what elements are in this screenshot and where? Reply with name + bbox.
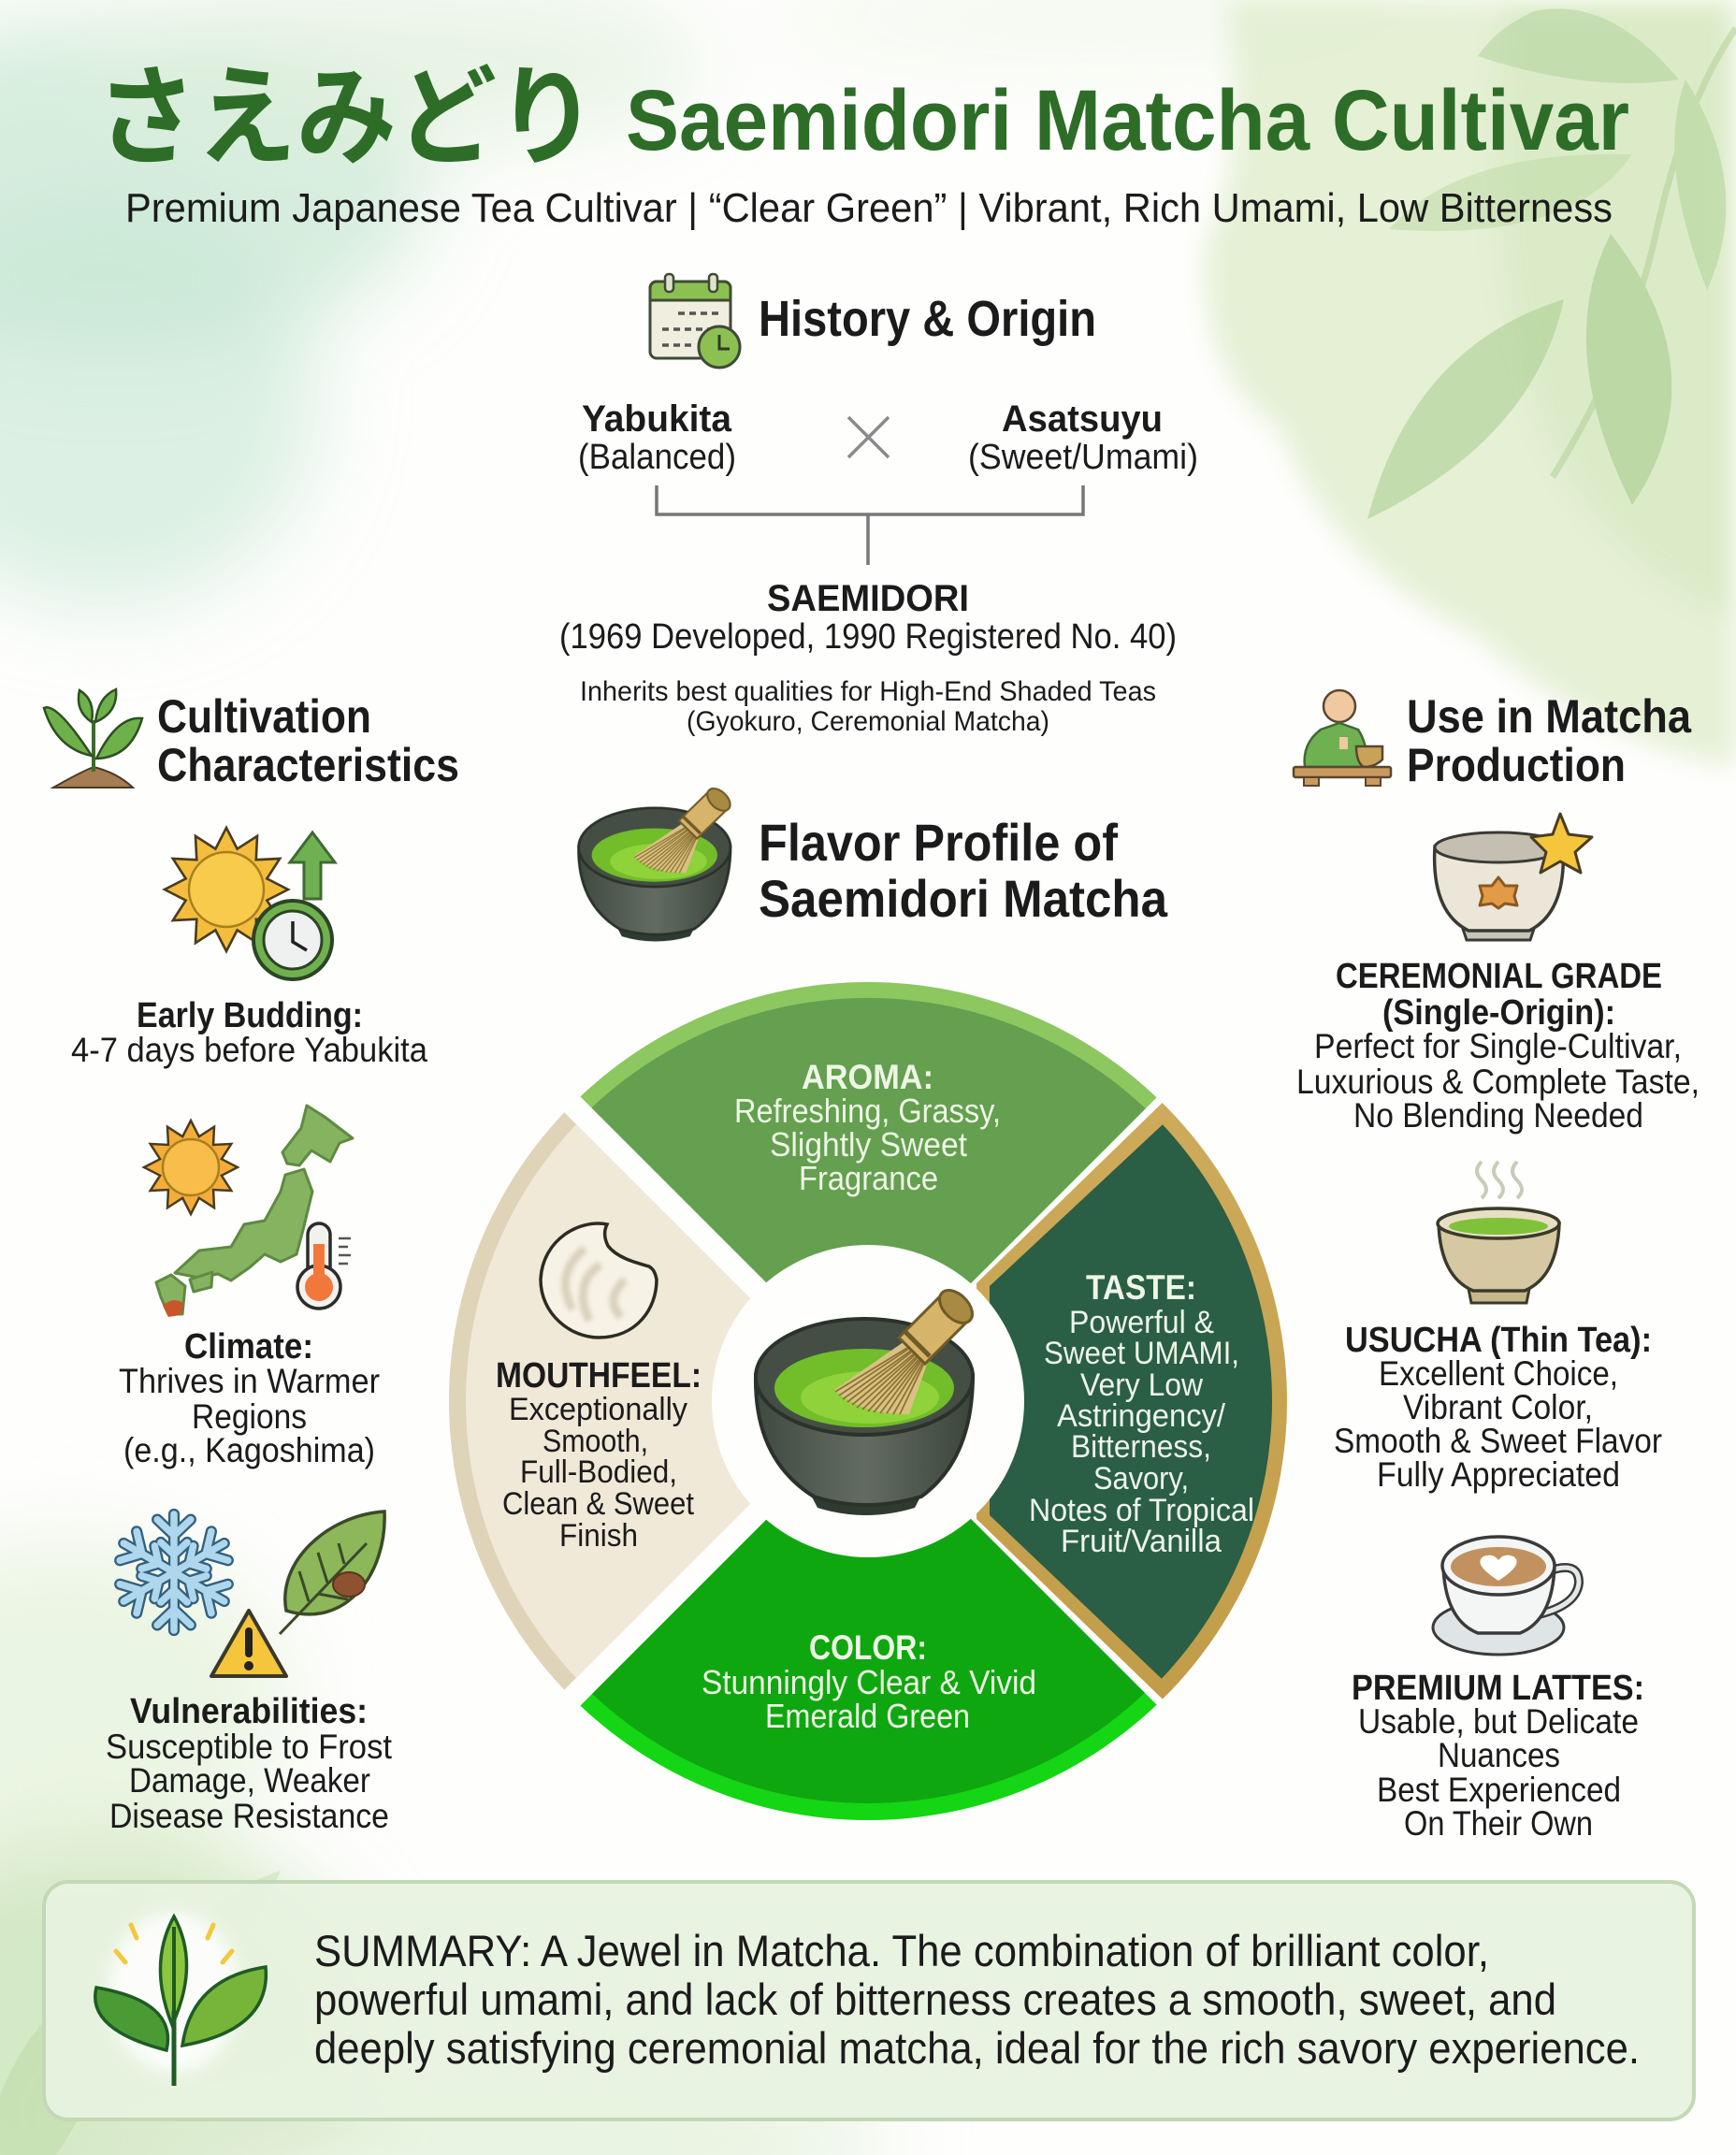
text: early budding <box>71 996 427 1069</box>
segment: aroma: AROMA: <box>802 1058 933 1096</box>
icon: small matcha bowl <box>579 785 734 942</box>
text: ceremonial grade: (Single-Origin): <box>1382 993 1615 1033</box>
segment: aroma <box>580 982 1156 1283</box>
summary text: powerful umami, and lack of bitterness creates a smooth, sweet, and <box>314 1974 1556 2024</box>
segment: mouthfeel <box>449 1113 750 1689</box>
heading: history and origin: History & Origin <box>759 291 1096 347</box>
segment: taste: Bitterness, <box>1071 1429 1211 1465</box>
icon: frost, diseased leaf and warning <box>115 1511 384 1676</box>
chart: flavor wheel <box>449 982 1287 1820</box>
icon: latte cup on saucer <box>1433 1537 1579 1655</box>
saemidori origin text <box>559 578 1177 737</box>
text: early budding: 4-7 days before Yabukita <box>71 1031 427 1069</box>
segment: mouthfeel: Full-Bodied, <box>520 1454 677 1490</box>
text: premium lattes: Best Experienced <box>1377 1771 1621 1809</box>
text: vulnerabilities: Susceptible to Frost <box>106 1728 393 1766</box>
icon: sun and japan map with thermometer <box>144 1106 353 1317</box>
cross symbol <box>848 417 889 457</box>
segment: taste: Fruit/Vanilla <box>1061 1524 1222 1559</box>
text: premium lattes <box>1352 1669 1644 1843</box>
text: usucha: Fully Appreciated <box>1377 1455 1620 1494</box>
icon: glowing tea sprout <box>95 1913 266 2086</box>
segment: taste: Notes of Tropical <box>1029 1493 1254 1528</box>
icon: calendar with clock <box>650 274 740 368</box>
text: premium lattes: Nuances <box>1438 1736 1560 1774</box>
saemidori origin text: Inherits best qualities for High-End Shaded Teas <box>580 676 1156 707</box>
heading: flavor profile with bowl icon <box>579 785 1168 942</box>
parent cultivar: Yabukita <box>578 398 736 477</box>
saemidori origin text: (1969 Developed, 1990 Registered No. 40) <box>559 617 1177 657</box>
text: climate: Climate: <box>184 1327 313 1367</box>
icon: sun, clock and up arrow <box>165 828 335 979</box>
summary text: deeply satisfying ceremonial matcha, ideal for the rich savory experience. <box>314 2023 1640 2073</box>
heading: use in matcha <box>1407 690 1692 791</box>
segment: color <box>580 1519 1157 1820</box>
text: premium lattes: PREMIUM LATTES: <box>1352 1669 1644 1708</box>
heading: use in matcha: Production <box>1407 739 1626 791</box>
parent cultivar: Asatsuyu <box>968 398 1198 477</box>
text: ceremonial grade: Luxurious & Complete Taste, <box>1296 1063 1700 1101</box>
summary text <box>314 1926 1640 2073</box>
icon: person at tea table <box>1294 690 1391 786</box>
panel: use in matcha production <box>1294 690 1700 1843</box>
saemidori origin text: (Gyokuro, Ceremonial Matcha) <box>687 706 1049 737</box>
segment: mouthfeel: Smooth, <box>542 1424 648 1459</box>
title: Saemidori Matcha Cultivar <box>626 73 1629 168</box>
segment: aroma: Fragrance <box>799 1159 938 1197</box>
text: usucha: Smooth & Sweet Flavor <box>1334 1422 1662 1460</box>
parent cultivar: Yabukita: Yabukita <box>582 398 732 440</box>
segment: mouthfeel: Finish <box>559 1518 638 1554</box>
text: ceremonial grade: Perfect for Single-Cultivar, <box>1314 1027 1682 1065</box>
center hub with matcha bowl <box>712 1245 1024 1557</box>
segment: mouthfeel: MOUTHFEEL: <box>496 1356 702 1396</box>
text: usucha <box>1334 1321 1662 1494</box>
icon: ceremonial bowl with star <box>1435 814 1592 940</box>
text: climate <box>119 1327 380 1469</box>
segment: taste: Astringency/ <box>1057 1398 1226 1434</box>
segment: taste: Sweet UMAMI, <box>1044 1336 1239 1371</box>
text: vulnerabilities: Damage, Weaker <box>129 1761 370 1800</box>
segment: aroma: Slightly Sweet <box>770 1125 967 1164</box>
segment: mouthfeel: Clean & Sweet <box>502 1486 695 1522</box>
heading: cultivation: Cultivation <box>157 690 371 743</box>
decorative leaves bottom left <box>0 1871 281 2155</box>
segment: color: Emerald Green <box>765 1697 970 1735</box>
text: ceremonial grade: No Blending Needed <box>1353 1096 1643 1135</box>
heading text: Flavor Profile of <box>759 813 1118 872</box>
segment: mouthfeel: Exceptionally <box>509 1392 687 1427</box>
text: ceremonial grade: CEREMONIAL GRADE <box>1336 957 1662 996</box>
saemidori origin text: SAEMIDORI <box>767 578 969 619</box>
heading: cultivation: Characteristics <box>157 739 459 791</box>
text: usucha: Vibrant Color, <box>1403 1388 1593 1426</box>
parent cultivar: Yabukita: (Balanced) <box>578 438 736 477</box>
segment: taste: TASTE: <box>1086 1268 1196 1307</box>
title <box>96 30 1629 187</box>
text: premium lattes: On Their Own <box>1404 1804 1593 1843</box>
heading: use in matcha: Use in Matcha <box>1407 690 1692 743</box>
text: climate: Thrives in Warmer <box>119 1362 380 1400</box>
title: さえみどり <box>96 30 597 187</box>
icon: steaming usucha bowl <box>1438 1162 1559 1303</box>
segment: taste: Savory, <box>1093 1461 1189 1497</box>
heading text: Saemidori Matcha <box>759 869 1168 928</box>
decorative tea branch top right <box>1367 8 1736 519</box>
subtitle: Premium Japanese Tea Cultivar | “Clear Green” | Vibrant, Rich Umami, Low Bitterness <box>125 185 1613 231</box>
panel: cultivation characteristics <box>44 689 459 1835</box>
text: vulnerabilities: Disease Resistance <box>109 1797 389 1835</box>
text: vulnerabilities <box>106 1692 393 1835</box>
heading: cultivation <box>157 690 459 791</box>
segment: color: Stunningly Clear & Vivid <box>702 1663 1036 1701</box>
icon: seedling <box>44 689 142 788</box>
segment: color: COLOR: <box>809 1628 927 1667</box>
parent cultivar: Asatsuyu: Asatsuyu <box>1002 398 1163 440</box>
text: early budding: Early Budding: <box>137 996 363 1035</box>
icon: cream swirl <box>541 1223 657 1338</box>
text: usucha: Excellent Choice, <box>1379 1354 1618 1393</box>
text: premium lattes: Usable, but Delicate <box>1358 1702 1639 1741</box>
panel: summary <box>44 1882 1694 2119</box>
summary text: SUMMARY: A Jewel in Matcha. The combination of brilliant color, <box>314 1926 1489 1975</box>
lineage bracket <box>657 485 1083 565</box>
segment: taste: Powerful & <box>1069 1305 1214 1340</box>
text: ceremonial grade <box>1296 957 1700 1135</box>
text: usucha: USUCHA (Thin Tea): <box>1345 1321 1652 1360</box>
segment: taste <box>976 1103 1287 1699</box>
text: vulnerabilities: Vulnerabilities: <box>130 1692 368 1731</box>
segment: taste: Very Low <box>1080 1367 1203 1403</box>
parent cultivar: Asatsuyu: (Sweet/Umami) <box>968 438 1198 477</box>
heading text <box>759 813 1168 928</box>
text: climate: Regions <box>192 1397 307 1436</box>
text: climate: (e.g., Kagoshima) <box>123 1431 375 1469</box>
segment: aroma: Refreshing, Grassy, <box>734 1092 1001 1130</box>
